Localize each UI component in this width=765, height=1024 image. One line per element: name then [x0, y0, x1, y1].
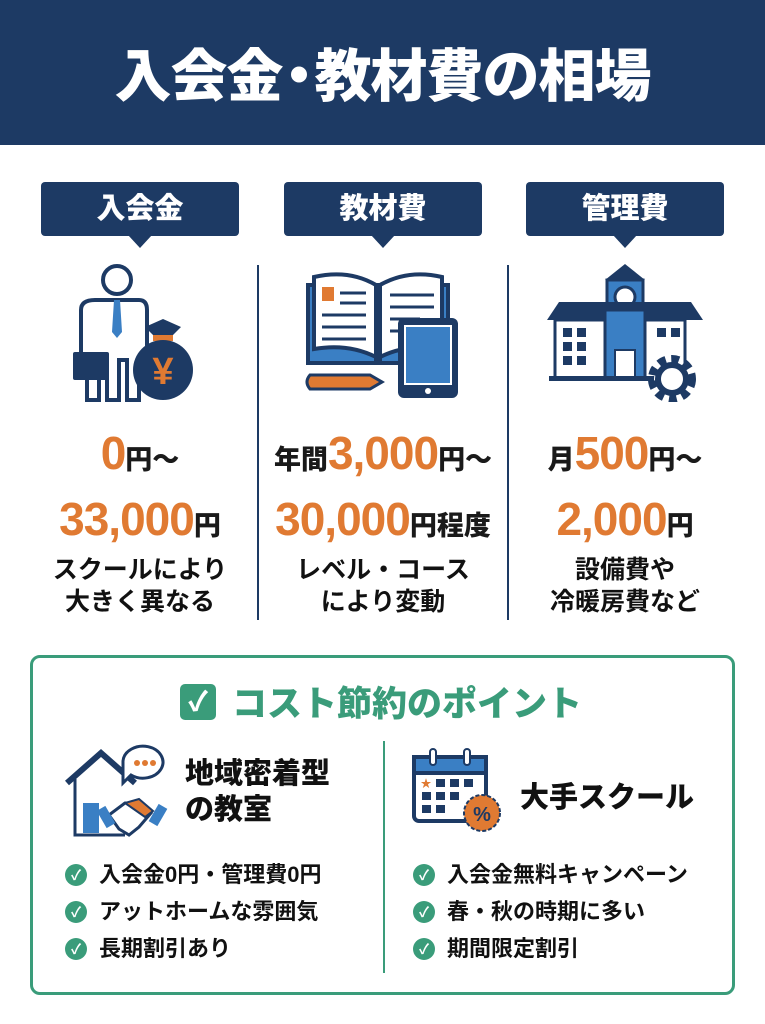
bullets: right: 期間限定割引: [447, 936, 579, 961]
label: 管理費: [526, 182, 724, 236]
icon: businessman with money bag: ¥: [152, 351, 174, 393]
price: 教材費: 30,000円程度: [275, 493, 491, 545]
price: 管理費: 月500円～: [548, 427, 702, 479]
desc: 管理費: [550, 556, 700, 616]
icon: calendar with discount: %: [473, 804, 491, 826]
subheading: 地域密着型の教室: [185, 758, 330, 826]
bullets: right: ✓: [419, 904, 429, 920]
price: 管理費: 2,000円: [556, 493, 694, 545]
label: 入会金: 入会金: [96, 193, 184, 225]
desc: 教材費: レベル・コース: [296, 556, 470, 584]
title: 入会金・教材費の相場: [114, 45, 650, 109]
panel: cost saving points: [30, 655, 735, 995]
bullets: right: ✓: [419, 866, 429, 882]
desc: 教材費: [296, 556, 470, 616]
heading: コスト節約のポイント: コスト節約のポイント: [232, 685, 582, 724]
desc: 管理費: 設備費や: [575, 556, 675, 584]
heading: コスト節約のポイント: ✓: [188, 686, 208, 716]
bullets: left: ✓: [71, 866, 81, 882]
label: 教材費: 教材費: [339, 193, 426, 225]
desc: 管理費: 冷暖房費など: [550, 588, 700, 616]
price: 入会金: 0円～: [101, 427, 179, 479]
label: 管理費: 管理費: [581, 193, 668, 225]
bullets: left: アットホームな雰囲気: [99, 899, 318, 924]
price: 入会金: [59, 427, 221, 545]
label: 入会金: [41, 182, 239, 236]
bullets: left: ✓: [71, 940, 81, 956]
icon: calendar with discount: ★: [420, 778, 432, 790]
subheading: 地域密着型の教室: 地域密着型: [185, 758, 330, 790]
subheading: 大手スクール: 大手スクール: [520, 782, 694, 814]
icon: school building with gear: [547, 264, 703, 402]
subheading: 地域密着型の教室: の教室: [185, 794, 272, 826]
bullets: left: 長期割引あり: [99, 936, 231, 961]
bullets: right: [413, 862, 688, 961]
bullets: right: ✓: [419, 940, 429, 956]
bullets: left: [65, 862, 321, 961]
desc: 入会金: 大きく異なる: [65, 588, 215, 616]
bullets: right: 入会金無料キャンペーン: [447, 862, 688, 887]
icon: house with handshake: [65, 744, 168, 837]
header banner: [0, 0, 765, 145]
icon: book and tablet: [305, 272, 458, 398]
bullets: left: 入会金0円・管理費0円: [99, 862, 321, 887]
price: 教材費: 年間3,000円～: [274, 427, 492, 479]
desc: 入会金: [53, 556, 227, 616]
label: 教材費: [284, 182, 482, 236]
icon: businessman with money bag: [73, 264, 193, 402]
bullets: right: 春・秋の時期に多い: [447, 899, 645, 924]
price: 入会金: 33,000円: [59, 493, 221, 545]
price: 教材費: [274, 427, 492, 545]
desc: 教材費: により変動: [321, 588, 445, 616]
icon: calendar with discount: [412, 748, 501, 832]
price: 管理費: [548, 427, 702, 545]
bullets: left: ✓: [71, 904, 81, 920]
desc: 入会金: スクールにより: [53, 556, 227, 584]
